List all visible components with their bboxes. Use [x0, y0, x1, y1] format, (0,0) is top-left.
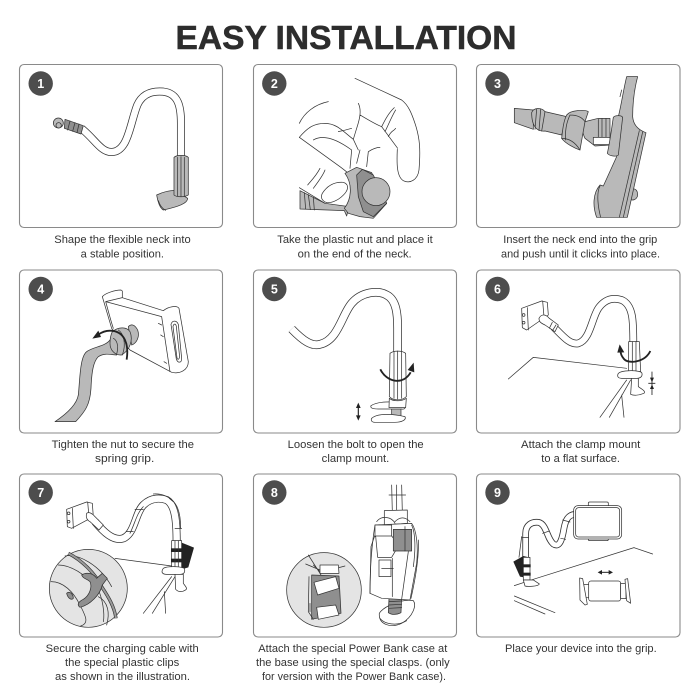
badge: step 9 number — [485, 480, 510, 505]
caption: step 1 — [54, 234, 191, 260]
illustration: clamp bolt with arrows — [292, 292, 414, 422]
callout: case detail — [287, 553, 361, 627]
caption: step 7: as shown in the illustration. — [55, 671, 190, 683]
illustration: hand holding the plastic nut — [299, 78, 420, 218]
caption: step 8: Attach the special Power Bank case at — [258, 643, 447, 655]
caption: step 4: spring grip. — [95, 453, 154, 465]
illustration: power bank case on clamp base — [287, 485, 418, 627]
panel: step 4 — [20, 270, 222, 465]
badge: step 7 number — [28, 480, 53, 505]
illustration: flexible neck — [53, 91, 188, 210]
callout: clip detail — [49, 549, 127, 627]
badge: step 3 number — [485, 71, 510, 96]
caption: step 8: for version with the Power Bank case). — [262, 671, 446, 683]
panel: step 7 — [20, 474, 222, 683]
panel: step 6 — [476, 270, 680, 465]
caption: step 7: the special plastic clips — [65, 657, 179, 669]
caption: step 5 — [288, 439, 424, 465]
badge: step 6 number: 6 — [494, 282, 501, 296]
caption: step 3: Insert the neck end into the grip — [503, 234, 657, 246]
caption: step 8: the base using the special clasps. (only — [256, 657, 450, 669]
caption: step 6 — [521, 439, 640, 465]
caption: step 5: clamp mount. — [322, 453, 389, 465]
panel: step 2 — [254, 64, 456, 260]
panel: step 3 — [476, 64, 680, 260]
caption: step 2: on the end of the neck. — [298, 248, 412, 260]
caption: step 3: and push until it clicks into place. — [501, 248, 660, 260]
badge: step 6 number — [485, 277, 510, 301]
panel: step 5 — [254, 270, 456, 465]
title: EASY INSTALLATION — [176, 19, 516, 56]
caption: step 2: Take the plastic nut and place it — [277, 234, 433, 246]
panel: step 9 — [476, 474, 680, 655]
badge: step 3 number: 3 — [494, 77, 501, 91]
badge: step 5 number: 5 — [271, 282, 278, 296]
arrow: clamp opening — [356, 403, 361, 421]
caption: step 3 — [501, 234, 660, 260]
panel: step 8 — [254, 474, 456, 683]
caption: step 9: Place your device into the grip. — [505, 643, 657, 655]
badge: step 7 number: 7 — [37, 486, 44, 500]
caption: step 8 — [256, 643, 450, 683]
badge: step 4 number — [28, 277, 53, 301]
caption: step 6: Attach the clamp mount — [521, 439, 640, 451]
badge: step 1 number: 1 — [37, 77, 44, 91]
caption: step 6: to a flat surface. — [541, 453, 620, 465]
caption: step 7: Secure the charging cable with — [46, 643, 199, 655]
caption: step 4 — [52, 439, 194, 465]
caption: step 4: Tighten the nut to secure the — [52, 439, 194, 451]
caption: step 1: Shape the flexible neck into — [54, 234, 191, 246]
badge: step 2 number: 2 — [271, 77, 278, 91]
badge: step 1 number — [28, 71, 53, 96]
caption: step 2 — [277, 234, 433, 260]
arrow: grip width adjust — [598, 570, 613, 575]
illustration: neck with cable clips — [49, 494, 194, 627]
illustration: neck inserted into grip — [514, 77, 646, 217]
panel: step 1 — [20, 64, 222, 260]
caption: step 1: a stable position. — [81, 248, 164, 260]
caption: step 7 — [46, 643, 199, 683]
badge: step 9 number: 9 — [494, 486, 501, 500]
illustration: clamp on flat surface — [508, 299, 655, 417]
caption: step 5: Loosen the bolt to open the — [288, 439, 424, 451]
illustration: device placed into grip — [513, 502, 653, 614]
badge: step 5 number — [262, 277, 286, 301]
badge: step 8 number: 8 — [271, 486, 278, 500]
arrow: clamp closing — [648, 372, 655, 395]
badge: step 8 number — [262, 480, 286, 505]
illustration: spring grip with nut and arrow — [55, 290, 188, 422]
badge: step 2 number — [262, 71, 286, 96]
badge: step 4 number: 4 — [37, 282, 44, 296]
